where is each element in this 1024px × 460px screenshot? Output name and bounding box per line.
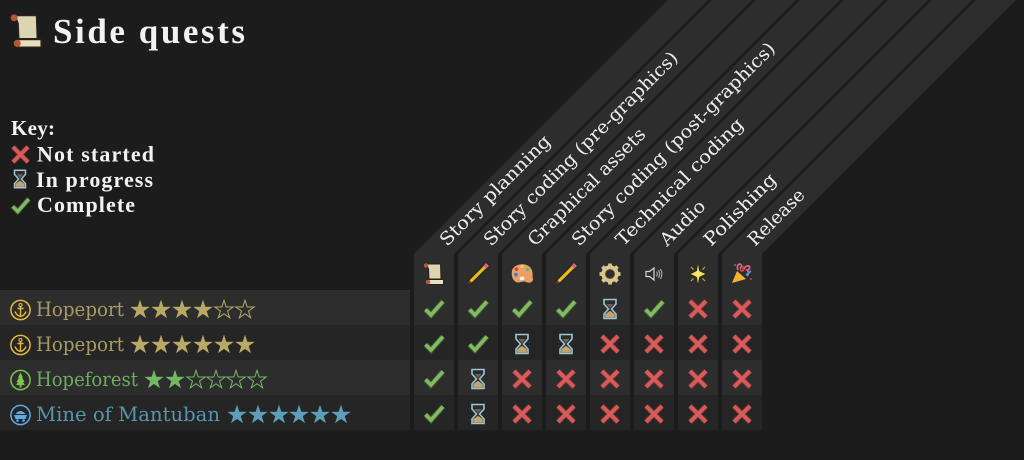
icon: party popper (732, 264, 752, 283)
column: story coding pre-graphics: Story coding (pre-graphics) (480, 48, 683, 251)
column strips with slanted headers (414, 0, 1016, 430)
star rating (131, 300, 254, 318)
icon: gear (600, 264, 620, 284)
column: story coding post-graphics (546, 0, 840, 430)
icon: speaker (646, 268, 662, 280)
column: audio: Audio (655, 196, 710, 251)
star rating (131, 335, 254, 353)
key: complete: Complete (37, 192, 135, 217)
column: polishing (678, 0, 972, 430)
key heading: Key: (11, 116, 55, 140)
column: story coding pre-graphics (458, 0, 752, 430)
row shading over columns (414, 325, 762, 430)
row status marks (426, 334, 750, 354)
title: Side quests (53, 12, 245, 51)
row 1: Hopeport, 4 of 6 stars (0, 290, 750, 325)
row name: Hopeport (36, 297, 124, 321)
row status marks (426, 300, 750, 318)
icon: sparkle (690, 262, 706, 286)
row name: Mine of Mantuban (36, 402, 220, 426)
icon: tree badge (11, 370, 30, 390)
column: audio (634, 0, 928, 430)
column: graphical assets (502, 0, 796, 430)
column: story planning (414, 0, 708, 430)
column: technical coding (590, 0, 884, 430)
column: story coding post-graphics: Story coding (post-graphics) (568, 38, 780, 251)
icon: anchor badge (11, 335, 30, 355)
icon: palette (512, 264, 533, 283)
row background (0, 360, 410, 395)
column: technical coding: Technical coding (612, 114, 748, 251)
star rating (145, 370, 266, 388)
column: graphical assets: Graphical assets (524, 124, 650, 251)
row 4: Mine of Mantuban, 6 of 6 stars (0, 395, 750, 430)
column: release (722, 0, 1016, 430)
column header icons (424, 262, 752, 286)
row name: Hopeport (36, 332, 124, 356)
icon: mine cart badge (11, 405, 30, 425)
row name: Hopeforest (36, 367, 138, 391)
key: not started: Not started (37, 142, 154, 166)
icon: scroll (424, 263, 445, 284)
icon: pencil (468, 264, 488, 284)
row status marks (426, 370, 750, 388)
row 2: Hopeport, 6 of 6 stars (0, 325, 750, 360)
row status marks (426, 404, 750, 424)
row background (0, 395, 410, 430)
column: story planning: Story planning (436, 131, 555, 251)
icon: anchor badge (11, 300, 30, 320)
icon: pencil (556, 264, 576, 284)
star rating (228, 405, 350, 423)
column: release: Release (744, 185, 809, 251)
row background (0, 325, 410, 360)
column: polishing: Polishing (700, 169, 781, 251)
row background (0, 290, 410, 325)
icon: title scroll (11, 14, 44, 47)
key: in progress: In progress (36, 167, 153, 192)
key legend (11, 116, 154, 217)
row 3: Hopeforest, 2 of 6 stars (0, 360, 750, 395)
